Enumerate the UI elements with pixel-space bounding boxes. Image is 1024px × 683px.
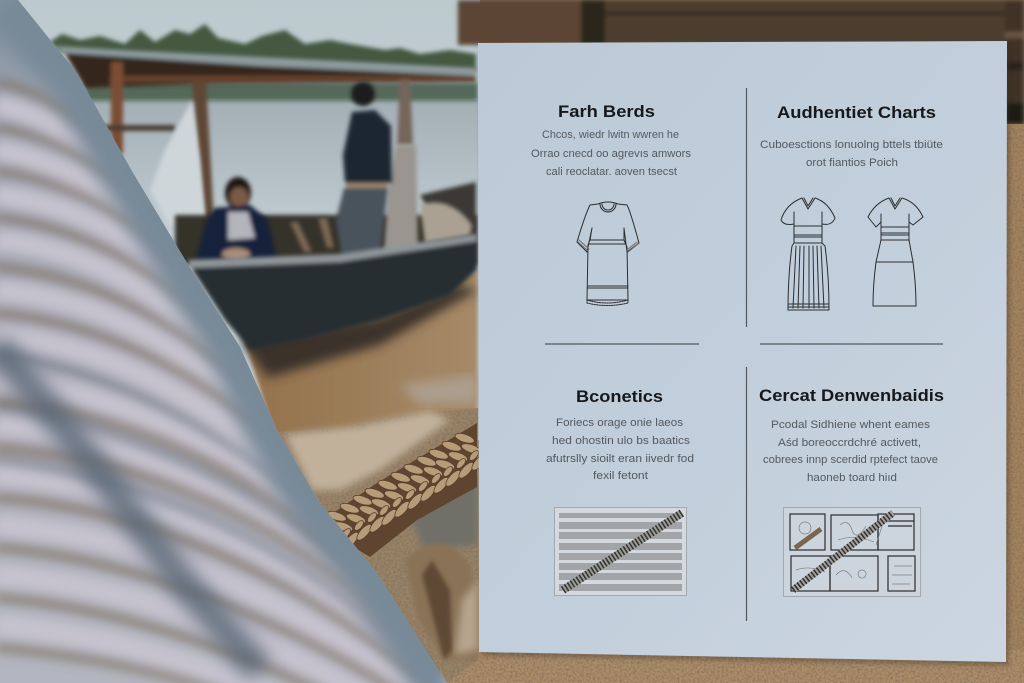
white sheet	[150, 100, 206, 226]
text block: Farh Berds description: Orrao cnecd oo agrevıs amwors	[531, 148, 692, 160]
text block: Bconetics description: fexil fetont	[593, 470, 648, 482]
brown stripes	[0, 83, 445, 683]
text block: Bconetics description	[546, 417, 694, 482]
top right wood wall	[458, 0, 1024, 125]
text block: Bconetics description: Foriecs orage onie laeos	[556, 417, 684, 429]
text block: Bconetics description: hed ohostin ulo bs baatics	[552, 435, 691, 447]
slate stripes	[0, 352, 386, 639]
pale highlights	[0, 105, 440, 683]
ground and mat on the right	[440, 124, 1024, 683]
standing person	[336, 82, 392, 256]
panel: Audhentiet Charts	[760, 103, 943, 310]
text block: Audhentiet Charts description	[760, 139, 943, 169]
guide sheet	[478, 41, 1007, 662]
river	[85, 100, 480, 230]
panel: Farh Berds	[531, 102, 692, 306]
icon: dress with straight skirt	[868, 198, 923, 306]
text block: Cercat Denwenbaidis description: Pcodal Sidhiene whent eames	[771, 419, 931, 431]
heading: Bconetics: Bconetics	[576, 387, 663, 406]
rope braid	[333, 423, 477, 557]
seated woman	[196, 177, 277, 260]
paper shadow	[480, 46, 1010, 666]
icon: patterned panel swatch with braid	[784, 508, 920, 596]
dividers	[545, 88, 943, 621]
muddy water	[240, 270, 478, 440]
icon: long dress with sleeves	[577, 202, 639, 306]
text block: Cercat Denwenbaidis description	[763, 419, 938, 484]
text block: Cercat Denwenbaidis description: haoneb toard hiıd	[807, 472, 897, 484]
icon: striped fabric swatch with braid	[554, 508, 686, 596]
panel: Bconetics	[546, 387, 694, 596]
icon: dress with pleated skirt	[781, 198, 835, 310]
foreground striped cloth	[0, 0, 460, 683]
text block: Cercat Denwenbaidis description: Aśd boreoccrdchré activett,	[778, 437, 921, 449]
tree line	[50, 24, 478, 101]
heading: Cercat Denwenbaidis: Cercat Denwenbaidis	[759, 386, 944, 405]
heading: Farh Berds: Farh Berds	[558, 102, 655, 121]
boat canopy	[55, 46, 476, 220]
boat hull	[188, 234, 477, 350]
text block: Audhentiet Charts description: Cuboesctions lonuolng bttels tbiüte	[760, 139, 943, 151]
blue edge band	[5, 0, 447, 683]
text block: Farh Berds description	[531, 129, 692, 178]
heading: Audhentiet Charts: Audhentiet Charts	[777, 103, 936, 122]
text block: Farh Berds description: Chcos, wiedr lwitn wwren he	[542, 129, 679, 141]
text block: Bconetics description: afutrslly sioilt eran iivedr fod	[546, 453, 694, 465]
text block: Cercat Denwenbaidis description: cobrees innp scerdid rptefect taove	[763, 454, 938, 466]
panel: Cercat Denwenbaidis	[759, 386, 944, 596]
boat interior	[175, 215, 477, 265]
knitted blanket	[278, 408, 489, 683]
post	[384, 145, 418, 252]
text block: Farh Berds description: cali reoclatar. aoven tsecst	[546, 166, 677, 178]
text block: Audhentiet Charts description: orot fiantios Poich	[806, 157, 898, 169]
dark slate streak	[0, 345, 260, 670]
